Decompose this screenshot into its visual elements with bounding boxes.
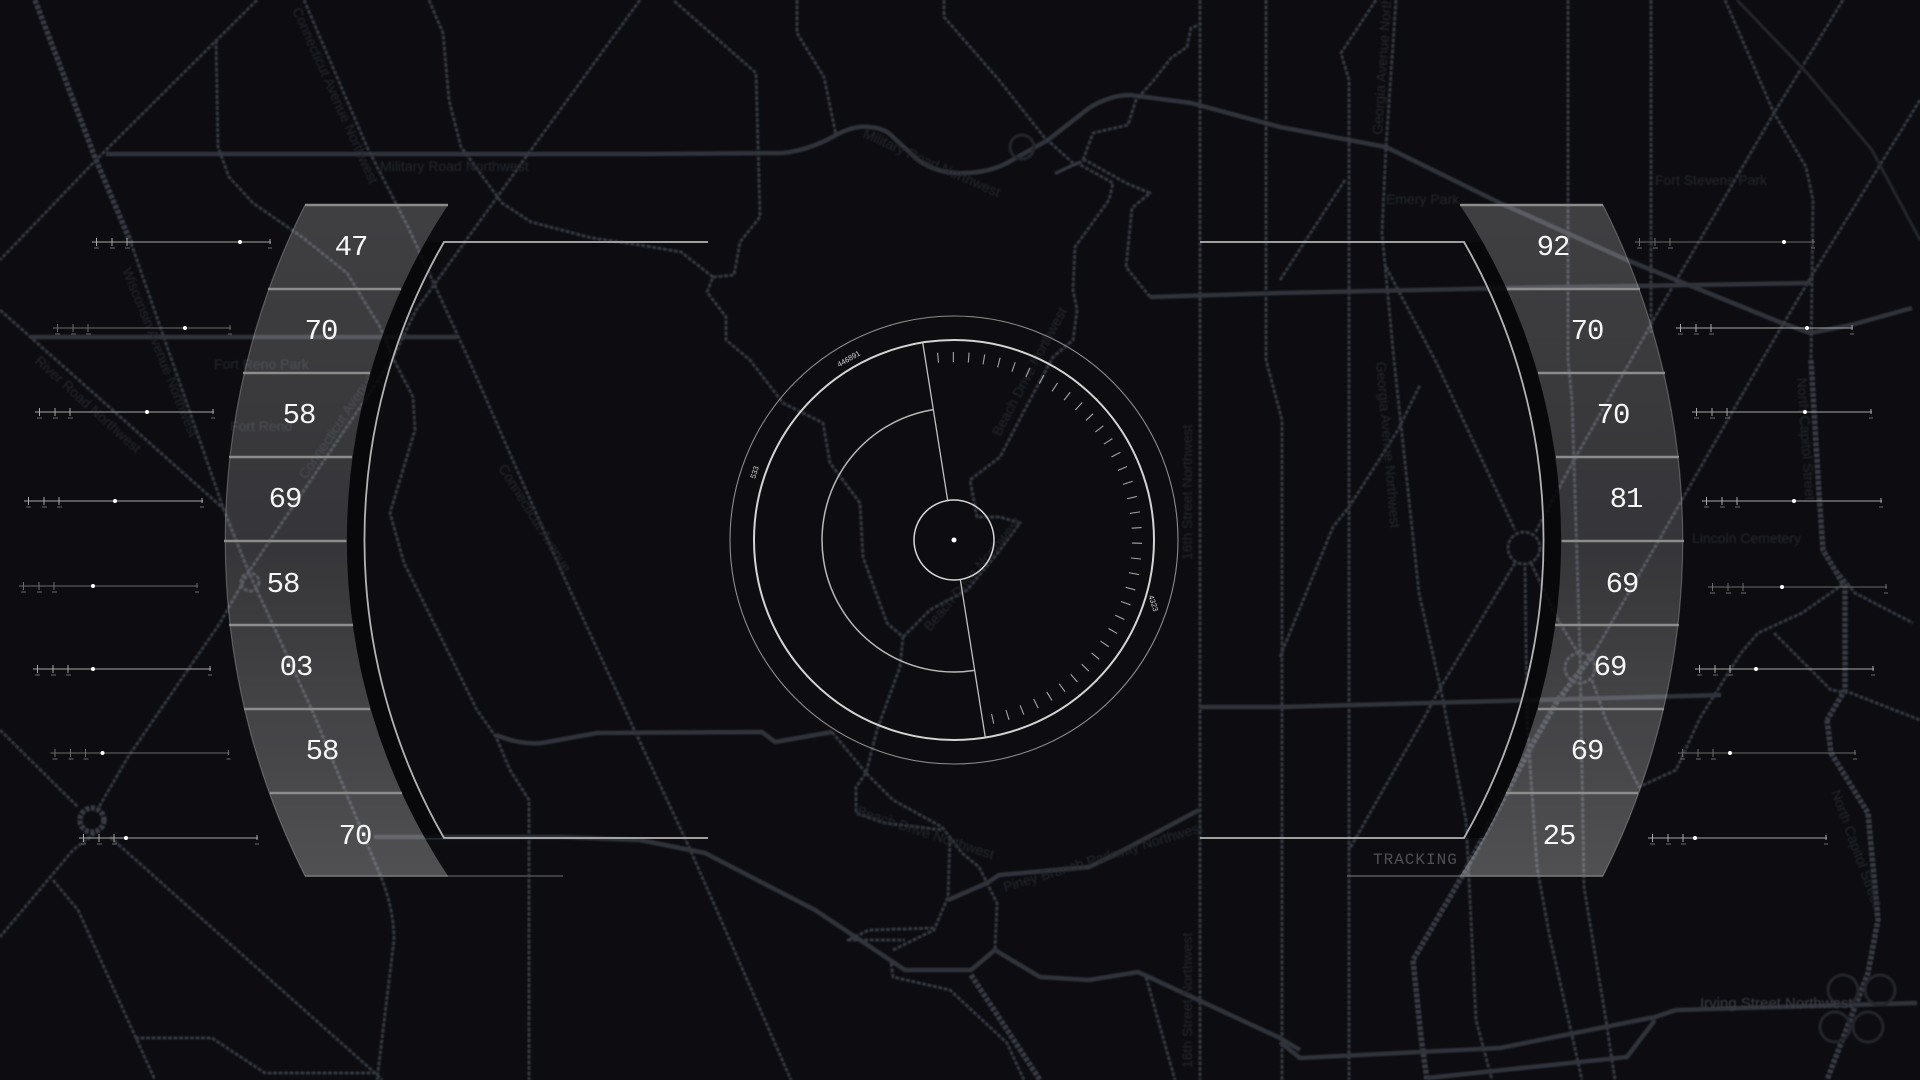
map street labels: Fort Stevens Park (1655, 172, 1768, 188)
map street labels: North Capitol Street (1794, 377, 1819, 501)
map street labels: Connecticut Avenue Northwest (289, 5, 382, 186)
left strip values: 03 (280, 651, 312, 684)
right scale rulers (1635, 238, 1888, 844)
inner half arc (822, 410, 975, 672)
map street labels: Irving Street Northwest (1700, 995, 1853, 1012)
tracking label: TRACKING (1373, 851, 1458, 869)
right strip values: 70 (1571, 315, 1603, 348)
map street labels: Lincoln Cemetery (1692, 530, 1801, 546)
tick marks (938, 352, 1142, 724)
map street labels: Beach Drive Northwest (920, 514, 1024, 634)
hub circle (914, 500, 994, 580)
ring label top: 446891 (836, 349, 862, 369)
map street labels: River Road Northwest (32, 352, 145, 456)
radial divider (923, 342, 985, 738)
left strip values: 58 (267, 568, 299, 601)
left strip values: 58 (283, 399, 315, 432)
map street labels: Beach Drive Northwest (989, 304, 1070, 438)
map street labels: 16th Street Northwest (1179, 424, 1195, 560)
ring label right: 4323 (1147, 594, 1160, 613)
panel: right segmented strip (1460, 205, 1684, 876)
map street labels: Emery Park (1386, 191, 1460, 207)
right strip values: 81 (1610, 483, 1642, 516)
left strip values: 58 (306, 735, 338, 768)
map street labels: Fort Reno (230, 418, 292, 434)
map street labels: Fort Reno Park (214, 356, 310, 372)
left strip values: 47 (335, 231, 367, 264)
map street labels: Piney Branch Parkway Northwest (1001, 819, 1205, 895)
map street labels: Connecticut Avenue (295, 370, 378, 482)
map street labels: Military Road Northwest (861, 125, 1003, 200)
ring label left: 533 (748, 465, 761, 480)
right bracket frame (1200, 242, 1544, 838)
outer ring (730, 316, 1178, 764)
right strip values (1537, 231, 1642, 853)
map street labels: Beach Drive Northwest (855, 803, 996, 862)
map street labels: Military Road Northwest (380, 158, 529, 174)
central radar dial (730, 316, 1178, 764)
left scale rulers (19, 238, 272, 844)
right strip values: 92 (1537, 231, 1569, 264)
map street labels: Connecticut Avenue (495, 461, 575, 575)
right strip values: 69 (1571, 735, 1603, 768)
left strip values: 70 (339, 820, 371, 853)
main ring (754, 340, 1154, 740)
left strip values: 70 (305, 315, 337, 348)
right baseline (1347, 875, 1460, 877)
right strip values: 69 (1594, 651, 1626, 684)
right strip values: 70 (1597, 399, 1629, 432)
centre dot (952, 538, 956, 542)
dark band: right (1464, 242, 1561, 838)
right strip values: 25 (1543, 820, 1575, 853)
left baseline (448, 875, 563, 877)
left strip values (267, 231, 371, 853)
map street labels: Wisconsin Avenue Northwest (119, 265, 202, 439)
left strip values: 69 (269, 483, 301, 516)
map street labels: 16th Street Northwest (1179, 932, 1195, 1068)
panel: left segmented strip (224, 205, 448, 876)
map street labels: Georgia Avenue Northwest (1373, 361, 1404, 529)
map street labels: North Capitol Street (1828, 788, 1885, 909)
left bracket frame (364, 242, 708, 838)
dark band: left (347, 242, 444, 838)
right strip values: 69 (1606, 568, 1638, 601)
